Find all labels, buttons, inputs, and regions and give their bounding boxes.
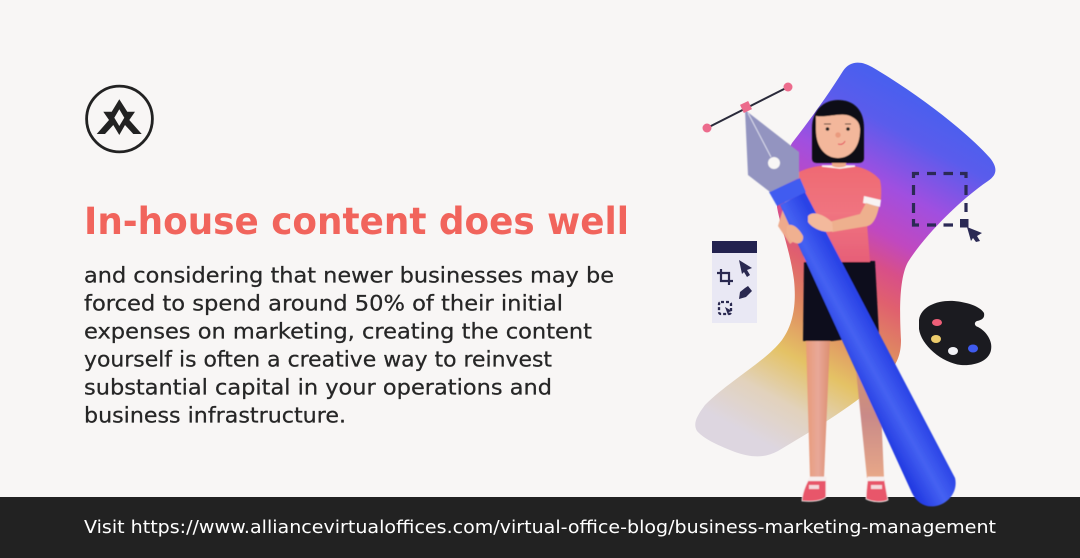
icon: paint palette bbox=[919, 301, 991, 365]
body text: forced to spend around 50% of their initial bbox=[84, 292, 563, 316]
heading: In-house content does well bbox=[84, 200, 629, 243]
nib hole bbox=[768, 157, 780, 169]
shirt bbox=[796, 165, 881, 262]
body text: expenses on marketing, creating the content bbox=[84, 320, 592, 344]
gradient blob bbox=[695, 63, 995, 456]
sleeve cuff bbox=[863, 196, 881, 207]
icon: bezier handle bbox=[702, 82, 792, 132]
pen collar bbox=[769, 178, 806, 206]
body text bbox=[84, 264, 614, 428]
front hand bbox=[808, 213, 833, 232]
neck bbox=[832, 155, 846, 168]
shorts bbox=[803, 261, 879, 341]
icon: dashed selection box with cursor bbox=[914, 174, 982, 242]
eyes bbox=[826, 127, 829, 131]
collar bbox=[822, 166, 855, 168]
mouth bbox=[838, 141, 845, 144]
body text: yourself is often a creative way to reinvest bbox=[84, 348, 552, 372]
icon: tool panel bbox=[712, 241, 757, 323]
right leg bbox=[856, 340, 884, 478]
footer bar bbox=[0, 497, 1080, 558]
face bbox=[816, 115, 860, 158]
body text: and considering that newer businesses may be bbox=[84, 264, 614, 288]
left leg bbox=[806, 338, 830, 478]
shoes bbox=[802, 477, 888, 502]
pen barrel bbox=[780, 192, 956, 506]
logo bbox=[87, 86, 152, 152]
body text: substantial capital in your operations and bbox=[84, 376, 552, 400]
right arm bbox=[829, 203, 879, 232]
footer text: Visit https://www.alliancevirtualoffices.com/virtual-office-blog/business-marketing-management bbox=[84, 517, 996, 538]
nose bbox=[835, 132, 841, 138]
character figure bbox=[745, 100, 956, 506]
body text: business infrastructure. bbox=[84, 404, 346, 428]
left arm bbox=[778, 198, 802, 244]
left hand fingers bbox=[786, 225, 803, 244]
hair back bbox=[812, 100, 864, 163]
pen nib bbox=[745, 110, 799, 192]
nib slit bbox=[748, 113, 771, 157]
